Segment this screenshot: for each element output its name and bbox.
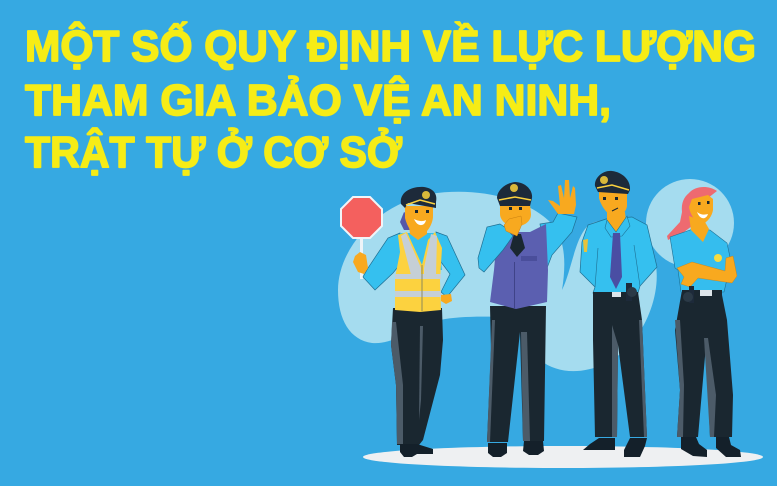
hand at whistle [504,216,522,236]
eyes and mouth [603,197,618,211]
tie [510,234,525,257]
neck [607,212,626,233]
eyes [509,207,522,210]
neck [689,216,709,242]
shoulder badge [583,239,588,252]
police cap [401,187,436,208]
backdrop circle [646,179,734,267]
pants [391,308,443,445]
hair [667,187,717,240]
pants [487,306,546,442]
pants [675,290,733,437]
title: TRẬT TỰ Ở CƠ SỞ [25,126,402,177]
stop sign [341,197,382,279]
hair [400,212,410,230]
title [25,20,756,177]
badge [714,254,722,262]
ground ellipse [363,446,763,468]
raised arm [540,213,577,268]
figure: traffic officer with stop sign [341,187,465,457]
face [689,195,713,225]
neck [409,226,427,240]
face [599,192,627,217]
eyes and smile [414,210,429,225]
raised hand [548,180,576,214]
shirt chest [398,233,442,270]
left arm [478,224,513,272]
belt and radio [593,283,638,301]
right arm [436,232,465,297]
pants [593,292,647,437]
blue shirt [670,229,731,292]
figure: officer with blue tie [580,171,657,457]
right hand [441,294,452,304]
police cap [595,171,630,194]
shoes [583,438,615,450]
title: THAM GIA BẢO VỆ AN NINH, [25,75,611,125]
crossed arms [677,256,737,287]
face [500,204,531,227]
blue shirt [580,217,657,293]
tie [610,233,622,289]
police cap [497,182,532,206]
sleeve line [595,245,640,287]
figure: female officer with crossed arms [667,187,741,457]
collar [605,216,630,237]
belt [682,286,722,303]
hand on sign [353,252,368,274]
safety vest [395,232,442,312]
shoes [681,437,707,457]
figure: whistle officer in purple vest [478,180,577,457]
purple vest [490,224,548,309]
shoes [488,443,507,457]
eyes and smile [697,201,710,218]
title: MỘT SỐ QUY ĐỊNH VỀ LỰC LƯỢNG [25,20,756,71]
backdrop blob [338,192,657,371]
left arm [363,233,402,290]
face [405,206,433,237]
shoes [400,444,433,457]
